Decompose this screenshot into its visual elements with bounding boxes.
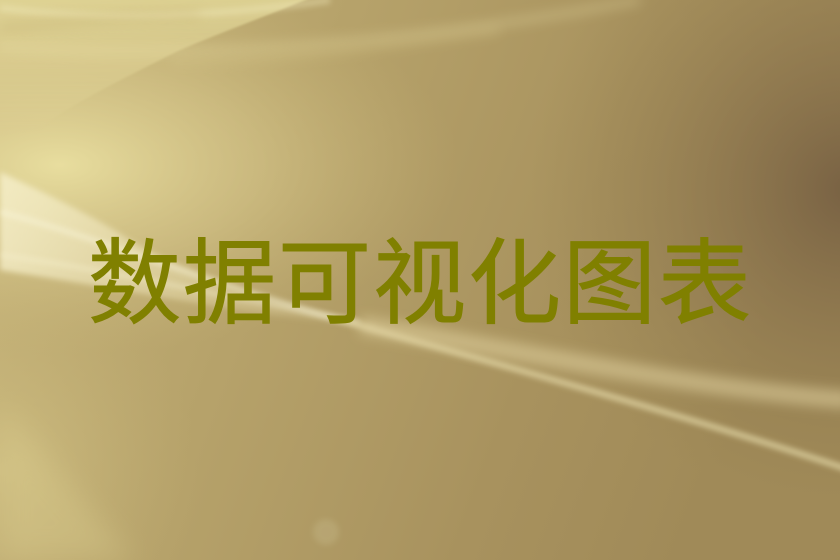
- title: 数据可视化图表: [88, 232, 753, 336]
